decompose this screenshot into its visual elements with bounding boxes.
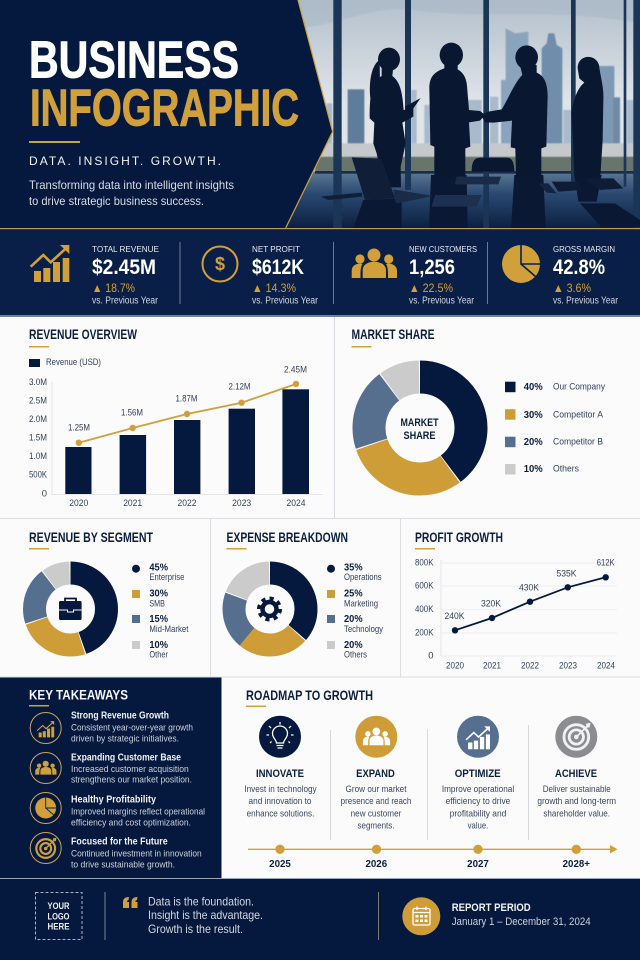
heading: ROADMAP TO GROWTH — [246, 687, 373, 703]
step: expand: presence and reach — [341, 796, 411, 807]
icon: target — [555, 716, 597, 758]
step: achieve: shareholder value. — [543, 808, 610, 820]
bar and line chart: 2021 — [123, 498, 142, 509]
KPI: net profit: ▲ 14.3% — [252, 281, 296, 295]
KPI: total revenue: $2.45M — [92, 256, 156, 279]
KPI: net profit: NET PROFIT — [252, 244, 300, 254]
heading: REVENUE BY SEGMENT — [29, 529, 153, 545]
line chart: 2022 — [521, 660, 539, 672]
timeline arrow: 2027 — [467, 858, 489, 870]
icon: pie chart — [502, 245, 540, 283]
chart legend: Revenue (USD) — [46, 357, 101, 368]
step: optimize: value. — [468, 820, 488, 832]
step: optimize: OPTIMIZE — [455, 768, 501, 780]
step: expand: new customer — [351, 808, 401, 820]
icon: people group — [352, 248, 397, 278]
panel: revenue overview — [29, 326, 323, 509]
expense legend: Operations — [344, 572, 382, 583]
KPI: total revenue — [31, 244, 159, 306]
expense legend: 20% — [344, 639, 363, 651]
KPI: gross margin: 42.8% — [553, 256, 605, 279]
step: innovate: Invest in technology — [244, 784, 317, 795]
icon: gear — [259, 598, 280, 620]
takeaway: revenue growth: driven by strategic initiatives. — [71, 734, 179, 744]
line chart: 2023 — [559, 660, 577, 672]
row divider lines — [0, 518, 640, 677]
KPI: new customers: vs. Previous Year — [409, 296, 475, 306]
bar and line chart: 1.0M — [29, 451, 47, 462]
market legend: Competitor A — [553, 410, 604, 420]
market legend — [505, 381, 605, 475]
line chart: 2021 — [483, 660, 501, 672]
KPI: gross margin — [502, 244, 619, 306]
step: achieve — [537, 716, 616, 820]
KPI: new customers: ▲ 22.5% — [409, 281, 453, 295]
donut chart — [234, 573, 306, 645]
line chart: 600K — [415, 580, 434, 592]
bar and line chart: 2.5M — [29, 396, 47, 406]
market legend: 20% — [524, 436, 543, 448]
donut centre label: SHARE — [404, 430, 436, 442]
segment legend: 10% — [149, 639, 169, 651]
line chart: 430K — [519, 582, 540, 594]
hero description: to drive strategic business success. — [29, 194, 204, 208]
logo placeholder: YOUR — [48, 901, 70, 911]
icon: rising bar chart — [31, 245, 69, 282]
segment legend — [132, 562, 189, 660]
takeaway: future focus: to drive sustainable growth. — [71, 860, 175, 870]
KPI: total revenue: vs. Previous Year — [92, 296, 159, 306]
expense legend: Others — [344, 650, 367, 660]
segment legend: Enterprise — [149, 572, 184, 583]
icon: dollar coin: $ — [215, 254, 225, 274]
takeaway: customer base: strengthens our market position. — [71, 774, 192, 786]
line chart — [415, 558, 617, 672]
report period — [452, 902, 591, 928]
takeaway: revenue growth: Strong Revenue Growth — [71, 710, 169, 722]
logo placeholder: HERE — [48, 922, 70, 932]
KPI: net profit — [202, 244, 319, 306]
KPI: new customers — [352, 244, 477, 306]
icon: people — [355, 716, 397, 758]
donut chart — [369, 377, 471, 479]
heading: KEY TAKEAWAYS — [29, 687, 128, 703]
report period: REPORT PERIOD — [452, 902, 531, 914]
bar and line chart: 2024 — [286, 498, 306, 509]
title: BUSINESS — [29, 32, 239, 90]
line chart: 535K — [556, 568, 577, 580]
donut centre label — [400, 417, 439, 442]
quote text: Data is the foundation. — [148, 894, 254, 908]
icon: people badge — [30, 752, 61, 784]
segment legend: 45% — [149, 562, 169, 574]
expense legend: 25% — [344, 588, 363, 600]
icon: light bulb — [259, 716, 301, 758]
KPI: gross margin: vs. Previous Year — [553, 296, 619, 306]
report period: January 1 – December 31, 2024 — [452, 916, 591, 928]
step: expand: Grow our market — [346, 784, 407, 795]
quote mark — [123, 897, 138, 908]
segment legend: 15% — [149, 613, 169, 625]
expense legend: Technology — [344, 624, 383, 635]
market legend: Others — [553, 464, 579, 474]
takeaway: future focus — [30, 832, 202, 870]
step: innovate — [244, 716, 317, 820]
donut chart — [34, 573, 106, 645]
bar and line chart: 1.5M — [29, 432, 47, 444]
bar and line chart: 3.0M — [29, 377, 47, 388]
market legend: Competitor B — [553, 436, 603, 448]
KPI: net profit: $612K — [252, 256, 304, 279]
takeaway: revenue growth: Consistent year-over-year growth — [71, 722, 193, 734]
panel: key takeaways — [0, 678, 222, 878]
hero description: Transforming data into intelligent insights — [29, 178, 234, 192]
segment legend: Other — [149, 650, 168, 660]
step: optimize — [442, 716, 514, 832]
takeaway: profitability: efficiency and cost optimization. — [71, 818, 191, 828]
icon: growth chart badge — [30, 712, 61, 744]
segment legend: SMB — [149, 598, 165, 610]
step: achieve: Deliver sustainable — [543, 784, 611, 795]
timeline arrow: 2026 — [365, 858, 387, 870]
takeaway: customer base: Increased customer acquisition — [71, 764, 189, 775]
panel: revenue by segment — [29, 529, 189, 660]
icon: growth chart — [457, 716, 499, 758]
panel: profit growth — [415, 529, 617, 672]
hero navy chevron panel — [0, 0, 333, 228]
KPI: net profit: vs. Previous Year — [252, 296, 319, 306]
segment legend: Mid-Market — [149, 624, 189, 635]
KPI: total revenue: ▲ 18.7% — [92, 281, 135, 295]
title: INFOGRAPHIC — [30, 80, 299, 138]
takeaway: future focus: Continued investment in innovation — [71, 848, 202, 860]
footer band — [0, 878, 640, 960]
takeaway: future focus: Focused for the Future — [71, 836, 168, 848]
step: innovate: INNOVATE — [256, 768, 304, 780]
segment legend: 30% — [149, 588, 169, 600]
bar and line chart: 2023 — [232, 498, 251, 509]
step: expand — [341, 716, 411, 832]
line chart: 800K — [415, 558, 434, 568]
bar and line chart: 500K — [29, 470, 48, 480]
step: achieve: ACHIEVE — [555, 768, 597, 780]
hero banner — [0, 0, 640, 229]
KPI band — [0, 228, 640, 317]
line chart: 320K — [481, 598, 502, 610]
step: innovate: and innovation to — [248, 796, 312, 807]
KPI: gross margin: GROSS MARGIN — [553, 244, 615, 254]
line chart: 2020 — [446, 660, 464, 672]
takeaway: profitability: Improved margins reflect operational — [71, 806, 205, 818]
expense legend — [327, 562, 383, 660]
line chart: 0 — [428, 650, 434, 662]
bar and line chart: 0 — [42, 488, 47, 500]
step: optimize: Improve operational — [442, 784, 514, 795]
chart legend — [29, 357, 101, 368]
takeaway: customer base: Expanding Customer Base — [71, 752, 181, 764]
line chart: 612K — [597, 558, 615, 568]
tagline: DATA. INSIGHT. GROWTH. — [29, 154, 221, 168]
bar and line chart — [29, 364, 323, 509]
hero description — [29, 178, 234, 208]
market legend: Our Company — [553, 382, 605, 392]
line chart: 200K — [415, 628, 434, 638]
line chart: 2024 — [597, 660, 615, 672]
expense legend: 20% — [344, 613, 363, 625]
icon: pie badge — [30, 792, 61, 824]
quote text — [148, 894, 263, 936]
bar and line chart: 2.12M — [228, 382, 251, 392]
market legend: 40% — [524, 381, 543, 393]
bar and line chart: 1.56M — [121, 408, 143, 418]
bar and line chart: 1.87M — [176, 394, 198, 404]
panel: roadmap to growth — [244, 687, 618, 870]
title accent rule — [29, 141, 80, 143]
icon: target badge — [30, 832, 61, 864]
KPI: new customers: 1,256 — [409, 256, 455, 279]
takeaway: profitability — [30, 792, 205, 828]
takeaway: profitability: Healthy Profitability — [71, 794, 156, 806]
KPI: new customers: NEW CUSTOMERS — [409, 244, 477, 254]
bar and line chart: 2020 — [69, 498, 88, 509]
icon: calendar — [402, 897, 440, 935]
quote text: Growth is the result. — [148, 922, 243, 936]
heading: MARKET SHARE — [352, 326, 434, 342]
expense legend: 35% — [344, 562, 363, 574]
heading: PROFIT GROWTH — [415, 529, 503, 545]
panel: expense breakdown — [226, 529, 383, 660]
logo placeholder: LOGO — [48, 912, 70, 922]
quote text: Insight is the advantage. — [148, 908, 263, 922]
bar and line chart: 2.0M — [29, 414, 47, 425]
panel divider — [334, 317, 335, 518]
KPI: gross margin: ▲ 3.6% — [553, 281, 591, 295]
step: expand: EXPAND — [356, 768, 395, 780]
step: optimize: profitability and — [450, 808, 506, 820]
expense legend: Marketing — [344, 598, 378, 610]
step: optimize: efficiency to drive — [446, 796, 510, 807]
donut centre label: MARKET — [400, 417, 439, 429]
step: achieve: growth and long-term — [537, 796, 616, 807]
bar and line chart: 2022 — [178, 498, 196, 509]
heading: EXPENSE BREAKDOWN — [226, 529, 348, 545]
logo placeholder — [36, 892, 82, 940]
takeaway: customer base — [30, 752, 192, 786]
line chart: 400K — [415, 604, 434, 615]
timeline arrow: 2025 — [269, 858, 291, 870]
takeaway: revenue growth — [30, 710, 193, 744]
icon: briefcase — [59, 598, 82, 620]
bar and line chart: 2.45M — [284, 364, 307, 376]
timeline arrow — [248, 845, 618, 870]
KPI: total revenue: TOTAL REVENUE — [92, 244, 159, 254]
market legend: 10% — [524, 463, 543, 475]
timeline arrow: 2028+ — [563, 858, 590, 870]
market legend: 30% — [524, 409, 543, 421]
title — [29, 32, 299, 138]
panel: market share — [352, 326, 605, 479]
step: innovate: enhance solutions. — [247, 808, 314, 820]
step: expand: segments. — [358, 820, 394, 832]
heading: REVENUE OVERVIEW — [29, 326, 138, 342]
bar and line chart: 1.25M — [68, 422, 90, 434]
hero photo: silhouetted business team at window — [285, 0, 640, 229]
line chart: 240K — [444, 611, 465, 622]
